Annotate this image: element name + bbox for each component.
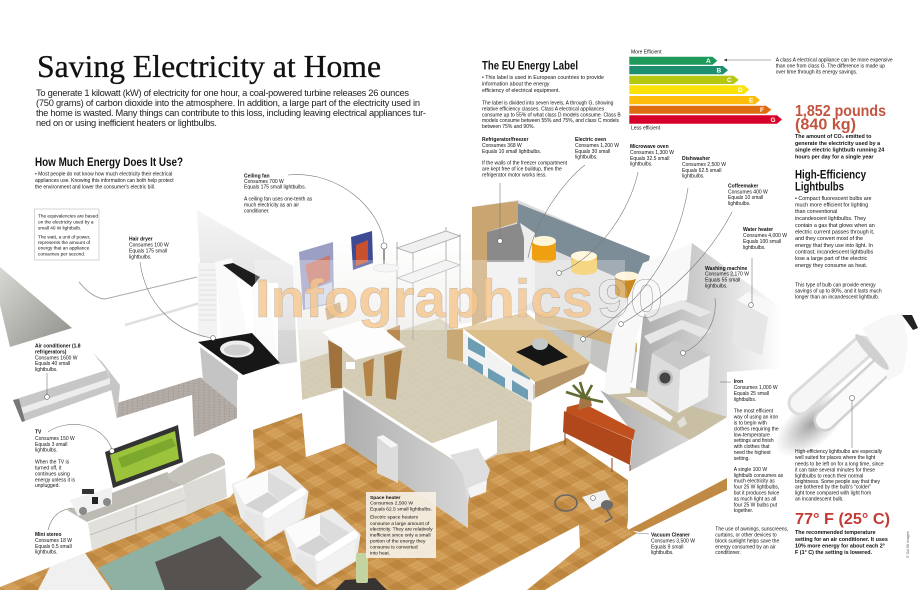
rug <box>98 511 307 590</box>
callout line: water heater <box>749 258 753 307</box>
label: electric oven: Equals 30 small <box>575 149 610 155</box>
label: ceiling fan: Ceiling fan <box>244 173 270 179</box>
label: dishwasher: Consumes 2,500 W <box>682 162 726 168</box>
furniture: ironing board and iron <box>625 397 687 428</box>
label: coffeemaker: Equals 10 small <box>728 195 763 201</box>
callout line: vacuum cleaner <box>591 496 649 534</box>
wall: gray corridor wall <box>343 390 468 528</box>
callout line: coffeemaker <box>619 212 732 326</box>
bar C: C <box>727 77 732 84</box>
label: air conditioner: Consumes 1600 W <box>35 355 78 361</box>
callout line: air conditioner <box>45 373 49 399</box>
text: EU label classes: between 75% and 90%. <box>482 124 535 130</box>
label: iron: four 25 W lightbulbs, <box>734 485 779 491</box>
label: television: lightbulbs. <box>35 448 58 454</box>
callout line: dishwasher <box>581 188 688 341</box>
text: compact fluorescent bulbs: lose a large part of the electric <box>795 256 868 262</box>
heading: high-efficiency lightbulbs: Lightbulbs <box>795 180 844 194</box>
label: vacuum cleaner: Equals 9 small <box>651 544 684 550</box>
label: television: When the TV is <box>35 460 70 466</box>
text: high-efficiency use: well suited for places where the light <box>795 455 876 461</box>
text: compact fluorescent bulbs: much more efficient for lighting <box>795 202 868 208</box>
label: iron: clothes requiring the <box>734 426 779 432</box>
wall: white block by dining floor <box>303 388 345 457</box>
floor: living room parquet <box>0 413 637 590</box>
label: iron: The most efficient <box>734 408 774 414</box>
text: high-efficiency use: it can take several minutes for these <box>795 467 875 473</box>
heading: EU energy label: The EU Energy Label <box>482 58 578 72</box>
furniture: console <box>67 453 227 550</box>
furniture: wire shelves <box>397 227 460 340</box>
text: high-efficiency use: brightness. Some people say that they <box>795 479 881 485</box>
label: refrigerator: Refrigerator/freezer <box>482 137 528 143</box>
label: air conditioner: lightbulbs. <box>35 367 58 373</box>
furniture: left sofa <box>38 553 111 590</box>
furniture: armchair two <box>285 510 359 583</box>
text: class A note: A class A electrical appliance can be more expensive <box>776 58 893 64</box>
text: compact fluorescent bulbs: energy that they use into light. In <box>795 243 873 249</box>
label: iron: lightbulb consumes as <box>734 473 784 479</box>
text: CO2 note: The amount of CO₂ emitted to <box>795 134 872 140</box>
caption box: space heater <box>366 492 436 558</box>
text: CO2 note: hours per day for a single year <box>795 154 874 160</box>
text: EU label classes: relative efficiency classes. Class A electrical appliances <box>482 107 605 113</box>
kitchen: island <box>447 312 590 404</box>
label: television: turned off, it <box>35 465 62 471</box>
kitchen: fridge and oven <box>487 223 535 322</box>
label: refrigerator: are kept free of ice buildup, then the <box>482 167 562 173</box>
kitchen: back wall <box>472 200 650 363</box>
callout line: refrigerator <box>498 183 502 243</box>
text: EU label intro: • This label is used in European countries to provide <box>482 75 604 81</box>
label: refrigerator: refrigerator motor works less. <box>482 172 547 178</box>
text: temperature note: The recommended temperature <box>795 530 876 536</box>
wall: dining front <box>182 362 303 490</box>
text: compact fluorescent bulbs: • Compact fluorescent bulbs are <box>795 196 872 202</box>
text: awnings tip: energy consumed by an air <box>715 544 776 550</box>
note box: equivalencies: small 40 W lightbulb. <box>38 225 81 230</box>
label: iron: Consumes 1,000 W <box>734 385 778 391</box>
callout line: microwave <box>557 172 638 275</box>
text: high-efficiency use: needs to be left on for a long time, since <box>795 461 884 467</box>
label: vacuum cleaner: Consumes 3,500 W <box>651 538 695 544</box>
text: high-efficiency use: lightbulbs to reach their normal <box>795 473 863 479</box>
text: CO2 note: single electric lightbulb running 24 <box>795 148 884 154</box>
floor: tiled kitchen <box>300 318 535 472</box>
note box: equivalencies: on the electricity used by a <box>38 219 94 224</box>
furniture: orange sideboard <box>563 403 635 484</box>
wall: white column <box>603 243 692 395</box>
appliance: mini stereo <box>70 487 112 516</box>
text: awnings tip: block sunlight helps save the <box>715 539 779 545</box>
label: mini stereo: Consumes 18 W <box>35 538 72 544</box>
label: ceiling fan: much electricity as an air <box>244 203 299 209</box>
label: television: Consumes 150 W <box>35 436 75 442</box>
caption box: space heater: Equals 62.5 small lightbulbs. <box>370 507 432 513</box>
wall: bathroom front lower <box>117 395 194 462</box>
label: microwave oven: Microwave oven <box>630 144 669 150</box>
label: vacuum cleaner: Vacuum Cleaner <box>651 532 690 538</box>
text: compact fluorescent bulbs: energy they consume as heat. <box>795 263 867 269</box>
wall: top-left corner <box>0 267 72 347</box>
appliance: television <box>105 425 183 488</box>
label: refrigerator: Equals 10 small lightbulbs. <box>482 149 541 155</box>
label: more efficient: More Efficient <box>631 50 662 56</box>
furniture: laundry shelves <box>644 300 712 344</box>
stat: 1,852 pounds: (840 kg) <box>795 116 856 134</box>
wall: right white wall <box>628 420 727 530</box>
text: EU label intro: efficiency of electrical equipment. <box>482 88 560 94</box>
label: television: unplugged. <box>35 483 60 489</box>
wall: bathroom front upper <box>117 347 202 402</box>
appliance: vacuum cleaner <box>555 490 613 522</box>
heading: how much energy: How Much Energy Does It Use? <box>35 155 183 169</box>
label: iron: way of using an iron <box>734 414 778 420</box>
text: how much energy intro: • Most people do not know how much electricity their electrical <box>35 172 172 178</box>
label: microwave oven: Equals 32.5 small <box>630 156 669 162</box>
label: washing machine: Consumes 2,170 W <box>705 272 749 278</box>
text: high-efficiency use: High-efficiency lightbulbs are especially <box>795 449 883 455</box>
label: dishwasher: Dishwasher <box>682 156 710 162</box>
label: hair dryer: Hair dryer <box>129 237 153 243</box>
callout line: electric oven <box>528 165 585 258</box>
intro text: To generate 1 kilowatt (kW) of electricity for one hour, a coal-powered turbine releases 26 ounces <box>36 88 409 98</box>
bar A <box>629 57 717 65</box>
text: EU label classes: The label is divided into seven levels, A through G, showing <box>482 101 614 107</box>
icon: ceiling fan <box>373 249 399 272</box>
label: microwave oven: Consumes 1,300 W <box>630 150 674 156</box>
intro text: the home is wasted. Many things can contribute to this loss, including leaving electrical appliances tur- <box>36 108 426 118</box>
label: iron: Equals 25 small <box>734 391 769 397</box>
label: coffeemaker: Consumes 400 W <box>728 189 768 195</box>
label: iron: setting. <box>734 456 750 462</box>
label: refrigerator: If the walls of the freezer compartment <box>482 161 568 167</box>
kitchen: lower cabinets <box>535 320 637 383</box>
label: refrigerator: Consumes 368 W <box>482 143 522 149</box>
illustration: cutaway house <box>0 190 787 590</box>
caption box: space heater: Electric space heaters <box>370 515 419 521</box>
label: iron: with clothes that <box>734 444 770 450</box>
note box: equivalencies: The watt, a unit of power, <box>38 234 90 239</box>
bar D: D <box>738 87 743 94</box>
bulb tube two <box>825 367 882 420</box>
label: hair dryer: Consumes 100 W <box>129 243 169 249</box>
text: temperature note: setting for an air conditioner. It uses <box>795 537 888 543</box>
text: compact fluorescent bulbs: incandescent lightbulbs. They <box>795 216 866 222</box>
text: temperature note: 10% more energy for about each 2° <box>795 544 885 550</box>
label: television: continues using <box>35 471 70 477</box>
bar G: G <box>770 117 776 124</box>
text: compact fluorescent bulbs: and they convert most of the <box>795 236 863 242</box>
label: iron: A single 100 W <box>734 467 767 473</box>
text: high-efficiency use: light tone compared with light from <box>795 490 871 496</box>
label: washing machine: Washing machine <box>705 266 748 272</box>
label: iron: need the highest <box>734 450 771 456</box>
text: how much energy intro: the environment and lower the consumer's electric bill. <box>35 185 155 191</box>
label: dishwasher: Equals 62.5 small <box>682 168 721 174</box>
text: bulb savings: savings of up to 80%, and it lasts much <box>795 288 882 294</box>
caption box: space heater: into heat. <box>370 550 390 556</box>
label: water heater: Water heater <box>743 227 773 233</box>
wall edge <box>727 372 787 590</box>
lamp: pendant one <box>532 236 556 263</box>
label: less efficient: Less efficient <box>631 126 661 132</box>
text: temperature note: F (1° C) the setting is lowered. <box>795 550 873 556</box>
callout line: television <box>48 424 114 453</box>
label: microwave oven: lightbulbs. <box>630 162 653 168</box>
text: how much energy intro: appliances use. Knowing this information can both help protect <box>35 178 174 184</box>
label: mini stereo: lightbulbs. <box>35 550 58 556</box>
label: ceiling fan: Consumes 700 W <box>244 179 284 185</box>
label: ceiling fan: A ceiling fan uses one-tenth as <box>244 197 313 203</box>
label: mini stereo: Mini stereo <box>35 532 61 538</box>
label: water heater: lightbulbs. <box>743 245 766 251</box>
label: iron: as much light as all <box>734 497 776 503</box>
wall: corridor return <box>430 420 497 470</box>
plant <box>566 382 603 410</box>
lamp: pendant three <box>615 272 639 298</box>
intro text: (750 grams) of carbon dioxide into the atmosphere. In addition, a large part of the electricity used in <box>36 98 420 108</box>
caption box: space heater: inefficient since only a small <box>370 532 431 538</box>
wall: dining room back wall <box>293 190 472 362</box>
label: washing machine: lightbulbs. <box>705 283 728 289</box>
label: mini stereo: Equals 0.5 small <box>35 544 72 550</box>
label: iron: is to begin with <box>734 420 767 426</box>
bar B: B <box>716 68 722 74</box>
text: awnings tip: curtains, or other devices to <box>715 533 777 539</box>
wall: laundry back wall <box>635 243 782 440</box>
bar E <box>629 96 760 104</box>
text: CO2 note: generate the electricity used by a <box>795 141 881 147</box>
floor strip: right parquet edge <box>628 478 727 532</box>
stat: 77 F: 77° F (25° C) <box>795 511 890 528</box>
kitchen: tall beige cabinet <box>472 201 518 326</box>
bar G <box>629 115 782 124</box>
furniture: coffee table <box>155 536 262 590</box>
title: Saving Electricity at Home <box>37 48 381 84</box>
bar F: F <box>760 107 764 114</box>
wall: bathroom front corner <box>93 353 120 420</box>
bulb tube one <box>800 348 862 403</box>
wall: gray laundry wall <box>600 390 690 472</box>
callout line: ceiling fan <box>288 175 387 249</box>
label: vacuum cleaner: lightbulbs. <box>651 550 674 556</box>
furniture: side table with vase <box>335 553 387 590</box>
label: ceiling fan: conditioner. <box>244 209 270 215</box>
label: iron: Iron <box>734 379 743 385</box>
label: coffeemaker: Coffeemaker <box>728 184 758 190</box>
label: electric oven: Consumes 1,200 W <box>575 143 619 149</box>
label: water heater: Consumes 4,000 W <box>743 233 787 239</box>
label: hair dryer: lightbulbs. <box>129 254 152 260</box>
text: high-efficiency use: an incandescent bulb. <box>795 496 844 502</box>
bulb base <box>862 313 908 381</box>
kitchen: upper cabinets <box>517 203 650 288</box>
floor: laundry <box>603 387 727 440</box>
label: air conditioner: Air conditioner (1.8 <box>35 344 81 350</box>
text: class A note: over time through its energy savings. <box>776 69 857 75</box>
caption box: space heater: consume a large amount of <box>370 521 430 527</box>
text: compact fluorescent bulbs: contain a gas that glows when an <box>795 223 875 229</box>
furniture: dining table and chairs <box>322 302 406 400</box>
watermark <box>255 260 663 330</box>
label: television: Equals 3 small <box>35 442 68 448</box>
label: ceiling fan: Equals 175 small lightbulbs. <box>244 185 306 191</box>
caption box: space heater: portion of the energy they <box>370 538 426 544</box>
text: bulb savings: This type of bulb can provide energy <box>795 283 876 289</box>
floor: bathroom <box>117 377 240 437</box>
artwork: poster one <box>299 242 334 310</box>
note box: equivalencies <box>34 209 99 260</box>
lamp: pendant two <box>571 251 597 275</box>
watermark: Infographics <box>255 269 593 329</box>
text: high-efficiency use: are bothered by the bulb's “colder” <box>795 485 871 491</box>
wall: partition behind sideboard <box>530 372 600 452</box>
text: EU label classes: models consume between 55% and 75%, and class C models <box>482 118 620 124</box>
watermark: 90 <box>597 269 663 329</box>
kitchen: back counter <box>535 312 637 352</box>
callout line: washing machine <box>681 298 715 355</box>
label: iron: low-temperature <box>734 432 770 438</box>
label: iron: together. <box>734 508 753 514</box>
label: electric oven: lightbulbs. <box>575 155 598 161</box>
text: compact fluorescent bulbs: electric current passes through it, <box>795 230 875 236</box>
callout line: hair dryer <box>140 262 215 340</box>
label: iron: but it produces twice <box>734 491 779 497</box>
intro text: ned on or using inefficient heaters or lightbulbs. <box>36 118 217 128</box>
wall: bottom white wall <box>455 525 580 590</box>
note box: equivalencies: consumes per second. <box>38 252 85 257</box>
label: air conditioner: refrigerators) <box>35 350 67 356</box>
note box: equivalencies: represents the amount of <box>38 240 91 245</box>
bulb shadow <box>764 379 860 469</box>
label: iron: lightbulbs. <box>734 397 756 403</box>
bar A: A <box>706 58 711 65</box>
caption box: space heater: electricity. They are relatively <box>370 527 433 533</box>
text: EU label intro: information about the energy <box>482 82 550 88</box>
label: dishwasher: lightbulbs. <box>682 174 705 180</box>
callout line: mini stereo <box>48 508 72 530</box>
text: class A note: than one from class G. The difference is made up <box>776 63 885 69</box>
label: water heater: Equals 100 small <box>743 239 781 245</box>
furniture: hallway chair <box>450 448 490 505</box>
wall: bathroom towel bars <box>79 277 200 325</box>
wall: bathroom partition <box>197 210 297 365</box>
caption box: space heater: Space heater <box>370 495 401 501</box>
caption box: space heater: consume is converted <box>370 544 418 550</box>
text: bulb savings: longer than an incandescent lightbulb. <box>795 294 879 300</box>
bar E: E <box>749 98 754 104</box>
heading: high-efficiency lightbulbs: High-Efficiency <box>795 168 866 182</box>
appliance: water heater <box>732 292 773 355</box>
bathroom: cabinets and vanity <box>198 258 280 408</box>
bulb cap <box>902 315 918 330</box>
note box: equivalencies: The equivalencies are based <box>38 213 98 218</box>
label: electric oven: Electric oven <box>575 137 606 143</box>
text: compact fluorescent bulbs: contrast, incandescent lightbulbs <box>795 250 874 256</box>
note box: equivalencies: energy that an appliance <box>38 246 90 251</box>
callout line: bulb <box>849 395 855 448</box>
wall: corridor wall top <box>343 388 470 469</box>
text: EU label classes: consume up to 55% of what class D models consume. Class B <box>482 112 621 118</box>
text: awnings tip: The use of awnings, sunscreens, <box>715 527 788 533</box>
appliance: air conditioner <box>13 370 112 422</box>
label: television: energy unless it is <box>35 477 76 483</box>
label: washing machine: Equals 55 small <box>705 278 740 284</box>
bar D <box>629 85 749 94</box>
furniture: armchair one <box>233 467 307 540</box>
credit: © Sol 90 Images <box>906 531 910 558</box>
artwork: poster two <box>351 231 373 270</box>
chart: EU energy label bars <box>629 50 782 132</box>
bar C <box>629 76 739 84</box>
appliance: washing machine <box>647 340 710 413</box>
illustration: compact fluorescent bulb <box>764 313 918 469</box>
arrow: class A note <box>724 59 771 61</box>
label: coffeemaker: lightbulbs. <box>728 201 751 207</box>
label: iron: much electricity as <box>734 479 775 485</box>
label: iron: settings and finish <box>734 438 774 444</box>
caption box: space heater: Consumes 2,500 W <box>370 500 413 506</box>
stat: 1,852 pounds: 1,852 pounds <box>795 103 886 120</box>
label: air conditioner: Equals 40 small <box>35 361 70 367</box>
bulb collar <box>852 331 892 373</box>
bar B <box>629 66 728 74</box>
text: awnings tip: conditioner. <box>715 550 741 556</box>
appliance: space heater <box>377 435 398 483</box>
label: iron: four 25 W bulbs put <box>734 502 778 508</box>
callout lines <box>45 165 753 534</box>
callout line: iron <box>720 381 731 383</box>
bar F <box>629 106 771 114</box>
text: compact fluorescent bulbs: than conventional <box>795 209 837 215</box>
label: hair dryer: Equals 175 small <box>129 248 167 254</box>
label: television: TV <box>35 430 42 436</box>
